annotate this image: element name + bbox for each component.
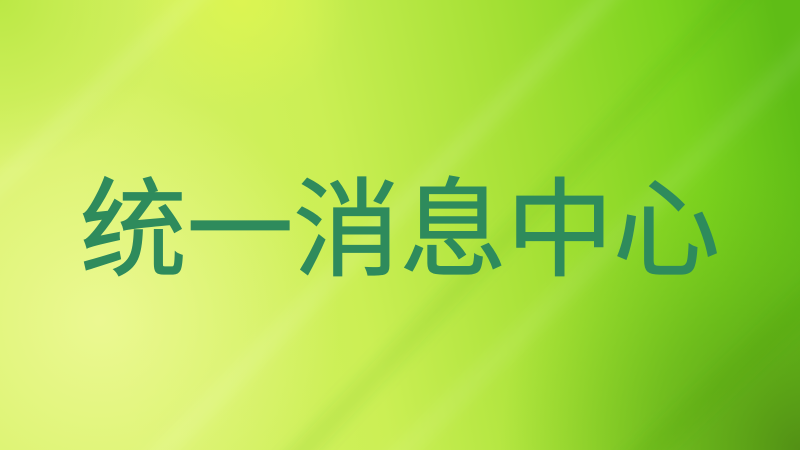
title: 统一消息中心 [80, 170, 720, 290]
